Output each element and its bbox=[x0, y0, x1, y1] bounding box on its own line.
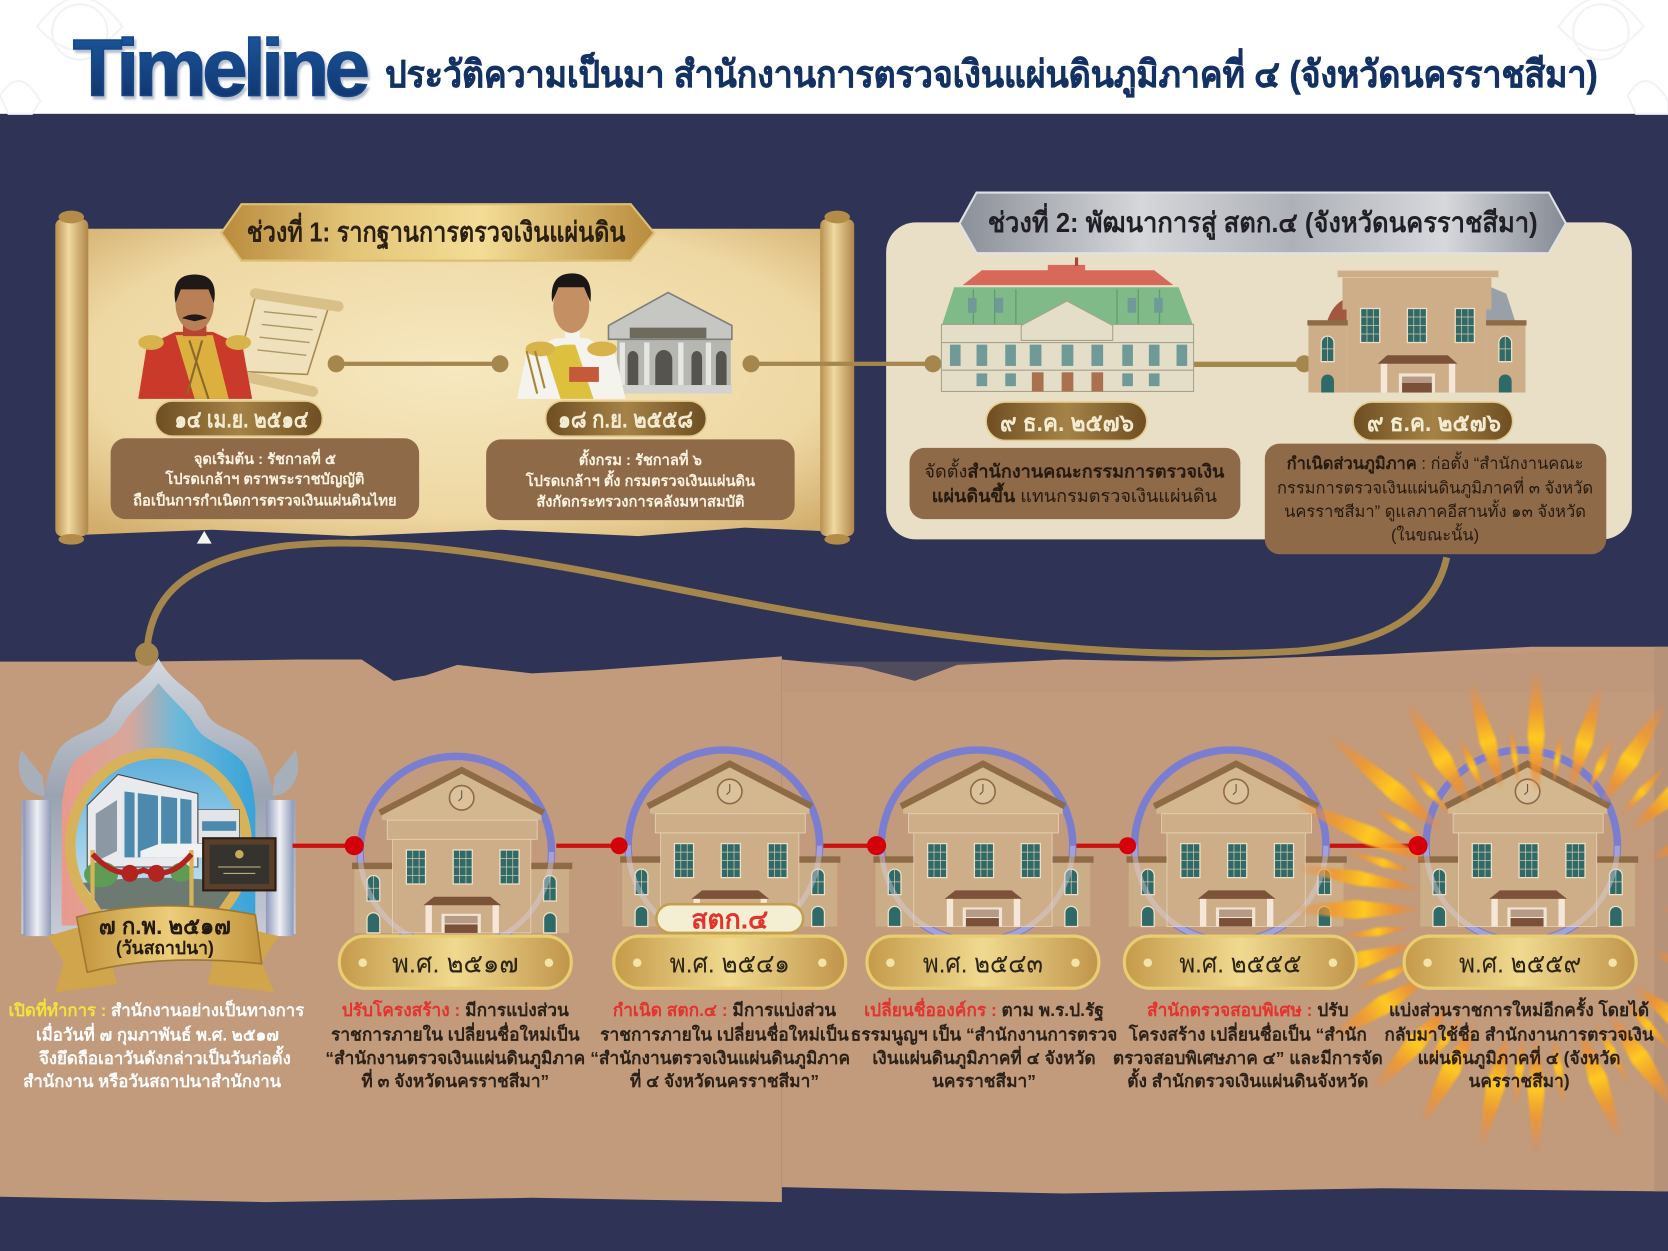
text: 2559 bbox=[1384, 997, 1654, 1091]
description 1: ถือเป็นการกำเนิดการตรวจเงินแผ่นดินไทย bbox=[133, 490, 397, 509]
date pill 4 bbox=[1353, 402, 1513, 440]
plate 2 bbox=[614, 936, 846, 988]
text: 2559: แผ่นดินภูมิภาคที่ ๔ (จังหวัด bbox=[1418, 1045, 1620, 1070]
text: opening: เปิดที่ทำการ : สำนักงานอย่างเป็นทางการ bbox=[9, 998, 304, 1020]
description 4: กรรมการตรวจเงินแผ่นดินภูมิภาคที่ ๓ จังหวัด bbox=[1277, 477, 1593, 499]
red dots bbox=[345, 836, 1428, 855]
building 2 bbox=[620, 750, 840, 941]
plate 4 bbox=[1124, 936, 1356, 988]
text: 2555: ตั้ง สำนักตรวจเงินแผ่นดินจังหวัด bbox=[1127, 1068, 1368, 1091]
title: Timeline: Timeline bbox=[73, 24, 370, 114]
timeline: red connectors bbox=[293, 844, 1418, 848]
date pill 3: ๙ ธ.ค. ๒๕๗๖ bbox=[1000, 410, 1134, 437]
description 1: จุดเริ่มต้น : รัชกาลที่ ๕ bbox=[194, 448, 336, 468]
badge: founding day arch bbox=[19, 658, 298, 993]
right roller bbox=[820, 211, 854, 545]
triangle mark bbox=[197, 531, 212, 544]
description 3 bbox=[910, 448, 1240, 519]
description 4: กำเนิดส่วนภูมิภาค : ก่อตั้ง “สำนักงานคณะ bbox=[1287, 451, 1583, 475]
ribbon banner: (วันสถาปนา) bbox=[116, 938, 214, 958]
description 3: แผ่นดินขึ้น แทนกรมตรวจเงินแผ่นดิน bbox=[932, 482, 1217, 506]
connector line 2 bbox=[743, 355, 941, 372]
text: 2543 bbox=[851, 997, 1117, 1091]
text: opening: เมื่อวันที่ ๗ กุมภาพันธ์ พ.ศ. ๒๕๑๗ bbox=[36, 1022, 279, 1045]
connector line 3 bbox=[1191, 355, 1313, 372]
date pill 2 bbox=[546, 401, 706, 436]
ribbon banner: ๗ ก.พ. ๒๕๑๗ bbox=[99, 913, 231, 939]
ribbon banner bbox=[48, 906, 279, 993]
description 4 bbox=[1265, 444, 1606, 554]
text: 2541 bbox=[590, 1000, 850, 1091]
text: 2555: สำนักตรวจสอบพิเศษ : ปรับ bbox=[1147, 1000, 1349, 1020]
description 2: ตั้งกรม : รัชกาลที่ ๖ bbox=[579, 449, 702, 469]
panel: lower parchment bbox=[0, 647, 1668, 1202]
text: 2517: ที่ ๓ จังหวัดนครราชสีมา” bbox=[361, 1068, 549, 1091]
banner: section 1: ช่วงที่ 1: รากฐานการตรวจเงินแผ่นดิน bbox=[247, 211, 626, 250]
description 3: จัดตั้งสำนักงานคณะกรรมการตรวจเงิน bbox=[924, 459, 1225, 482]
text: 2543: เงินแผ่นดินภูมิภาคที่ ๔ จังหวัด bbox=[872, 1045, 1096, 1070]
icon: modern office building bbox=[83, 774, 239, 910]
date pill 3 bbox=[986, 402, 1147, 440]
date pill 1 bbox=[155, 401, 322, 436]
label: สตก.๔: สตก.๔ bbox=[691, 905, 768, 935]
portrait: King Rama V with scroll bbox=[138, 274, 338, 399]
text: 2517 bbox=[325, 999, 585, 1091]
header band bbox=[0, 0, 1668, 114]
text: 2559: นครราชสีมา) bbox=[1469, 1071, 1570, 1091]
building 3 bbox=[873, 750, 1094, 941]
burst rays bbox=[1294, 673, 1668, 1150]
text: 2541: กำเนิด สตก.๔ : มีการแบ่งส่วน bbox=[613, 1000, 836, 1020]
description 2: โปรดเกล้าฯ ตั้ง กรมตรวจเงินแผ่นดิน bbox=[525, 470, 755, 490]
text: 2543: เปลี่ยนชื่อองค์กร : ตาม พ.ร.ป.รัฐ bbox=[864, 997, 1104, 1022]
plate 5 bbox=[1404, 936, 1636, 988]
text: 2555 bbox=[1113, 1000, 1383, 1091]
date pill 1: ๑๔ เม.ย. ๒๕๑๔ bbox=[174, 407, 308, 434]
text: 2541: “สำนักงานตรวจเงินแผ่นดินภูมิภาค bbox=[590, 1048, 850, 1070]
banner: section 1 bbox=[221, 204, 654, 261]
date pill 2: ๑๘ ก.ย. ๒๕๕๘ bbox=[558, 407, 693, 434]
description 4: (ในขณะนั้น) bbox=[1391, 522, 1479, 544]
icon: plaque bbox=[203, 838, 276, 890]
text: opening: สำนักงาน หรือวันสถาปนาสำนักงาน bbox=[23, 1071, 282, 1091]
text: opening bbox=[9, 998, 304, 1091]
left roller bbox=[55, 211, 88, 545]
text: 2541: ราชการภายใน เปลี่ยนชื่อใหม่เป็น bbox=[600, 1021, 849, 1044]
date pill 4: ๙ ธ.ค. ๒๕๗๖ bbox=[1367, 410, 1501, 437]
description 1: โปรดเกล้าฯ ตราพระราชบัญญัติ bbox=[164, 469, 364, 488]
label: สตก.๔ bbox=[656, 904, 803, 935]
icon: ornate historic building bbox=[941, 257, 1194, 391]
building 5 bbox=[1418, 750, 1638, 941]
plate 2: พ.ศ. ๒๕๔๑ bbox=[670, 948, 790, 978]
plate 3 bbox=[867, 936, 1099, 988]
description 2: สังกัดกระทรวงการคลังมหาสมบัติ bbox=[536, 493, 744, 510]
text: 2543: นครราชสีมา” bbox=[932, 1071, 1036, 1091]
connector curve bbox=[147, 543, 1447, 654]
text: 2559: กลับมาใช้ชื่อ สำนักงานการตรวจเงิน bbox=[1384, 1021, 1654, 1044]
description 4: นครราชสีมา” ดูแลภาคอีสานทั้ง ๑๓ จังหวัด bbox=[1284, 499, 1586, 522]
text: 2517: ปรับโครงสร้าง : มีการแบ่งส่วน bbox=[342, 999, 569, 1020]
banner: section 2: ช่วงที่ 2: พัฒนาการสู่ สตก.๔ (จังหวัดนครราชสีมา) bbox=[988, 202, 1538, 240]
building 1 bbox=[352, 756, 572, 948]
text: 2555: ตรวจสอบพิเศษภาค ๔” และมีการจัด bbox=[1113, 1048, 1383, 1068]
text: 2517: ราชการภายใน เปลี่ยนชื่อใหม่เป็น bbox=[331, 1021, 580, 1044]
plate 3: พ.ศ. ๒๕๔๓ bbox=[923, 948, 1043, 978]
plate 5: พ.ศ. ๒๕๕๙ bbox=[1459, 948, 1581, 978]
icon: ribbon posts bbox=[93, 850, 191, 917]
text: 2555: โครงสร้าง เปลี่ยนชื่อเป็น “สำนัก bbox=[1128, 1021, 1367, 1044]
timeline line 1 bbox=[328, 355, 508, 372]
icon: regional office building bbox=[1307, 270, 1527, 393]
description 2 bbox=[486, 439, 795, 520]
plate 4: พ.ศ. ๒๕๕๕ bbox=[1179, 948, 1302, 978]
description 1 bbox=[111, 438, 419, 519]
plate 1: พ.ศ. ๒๕๑๗ bbox=[392, 948, 519, 978]
text: opening: จึงยึดถือเอาวันดังกล่าวเป็นวันก่อตั้ง bbox=[39, 1045, 291, 1068]
portrait: King Rama VI with building bbox=[517, 273, 732, 399]
panel: section 2 bbox=[743, 193, 1632, 554]
text: 2517: “สำนักงานตรวจเงินแผ่นดินภูมิภาค bbox=[325, 1048, 585, 1070]
text: 2541: ที่ ๔ จังหวัดนครราชสีมา” bbox=[630, 1068, 819, 1091]
panel: section 1 scroll bbox=[55, 204, 854, 545]
text: 2543: ธรรมนูญฯ เป็น “สำนักงานการตรวจ bbox=[851, 1022, 1117, 1046]
text: 2559: แบ่งส่วนราชการใหม่อีกครั้ง โดยได้ bbox=[1389, 997, 1649, 1020]
plate 1 bbox=[339, 936, 571, 988]
banner: section 2 bbox=[960, 193, 1566, 253]
building 4 bbox=[1127, 750, 1347, 941]
